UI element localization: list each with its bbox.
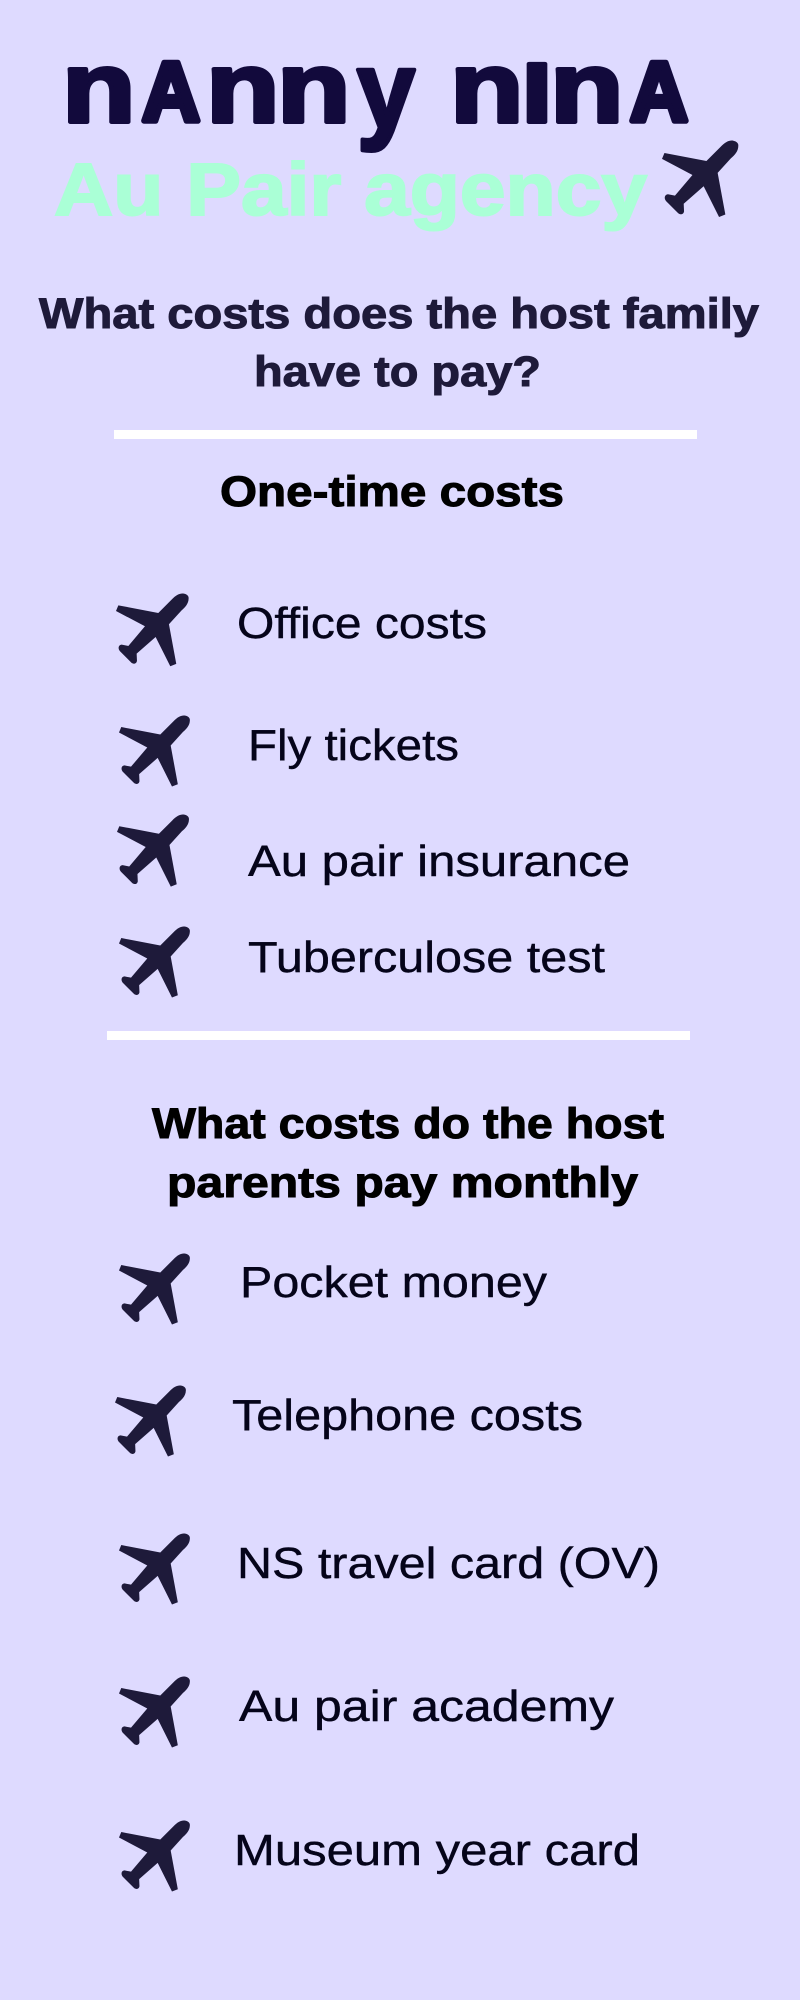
- icon: plane: [116, 594, 189, 666]
- section heading: monthly costs: [152, 1100, 664, 1207]
- list item: au pair academy: [119, 1676, 614, 1748]
- logo title: Nanny Nina: n: [450, 32, 524, 144]
- list item: pocket money: Pocket money: [240, 1258, 547, 1307]
- list item: museum year card: [119, 1820, 640, 1892]
- list item: tuberculose test: Tuberculose test: [248, 933, 605, 982]
- icon: plane: [119, 1676, 190, 1748]
- logo title: Nanny Nina: I: [522, 46, 552, 140]
- list item: office costs: [116, 594, 487, 666]
- heading: what costs does the host family have to pay: [39, 290, 759, 396]
- list item: au pair insurance: Au pair insurance: [248, 837, 630, 886]
- icon: plane: [119, 1820, 190, 1892]
- logo title: Nanny Nina: A: [630, 45, 688, 139]
- list item: pocket money: [119, 1253, 547, 1324]
- icon: plane: [117, 815, 189, 887]
- list item: fly tickets: Fly tickets: [248, 721, 459, 770]
- logo title: Nanny Nina: n: [550, 32, 624, 144]
- heading: what costs does the host family have to pay: have to pay?: [254, 348, 541, 396]
- logo title: Nanny Nina: A: [142, 45, 200, 139]
- list item: fly tickets: [119, 715, 459, 786]
- list item: telephone costs: [115, 1385, 583, 1456]
- icon: plane: [115, 1385, 186, 1456]
- list item: telephone costs: Telephone costs: [232, 1391, 583, 1440]
- logo title: Nanny Nina: n: [206, 32, 280, 144]
- heading: what costs does the host family have to pay: What costs does the host family: [39, 290, 759, 338]
- section heading: one-time costs: One-time costs: [220, 468, 564, 516]
- subtitle: Au Pair agency: Au Pair agency: [54, 148, 647, 231]
- logo title: Nanny Nina: n: [62, 32, 136, 144]
- list item: office costs: Office costs: [237, 599, 487, 648]
- list item: NS travel card: NS travel card (OV): [237, 1539, 660, 1588]
- list item: au pair academy: Au pair academy: [239, 1682, 614, 1731]
- logo title: Nanny Nina: y: [357, 29, 415, 152]
- logo title: Nanny Nina: n: [277, 32, 351, 144]
- section heading: monthly costs: parents pay monthly: [167, 1159, 638, 1207]
- section heading: monthly costs: What costs do the host: [152, 1100, 664, 1148]
- icon: plane: [119, 1533, 190, 1604]
- icon: plane: [119, 1253, 190, 1324]
- icon: plane: [119, 926, 190, 998]
- list item: museum year card: Museum year card: [234, 1826, 640, 1875]
- icon: plane: [119, 715, 190, 786]
- logo title: Nanny Nina: [62, 29, 688, 152]
- list item: NS travel card: [119, 1533, 660, 1604]
- icon: header plane: [662, 141, 738, 217]
- list item: tuberculose test: [119, 926, 605, 998]
- list item: au pair insurance: [117, 815, 630, 887]
